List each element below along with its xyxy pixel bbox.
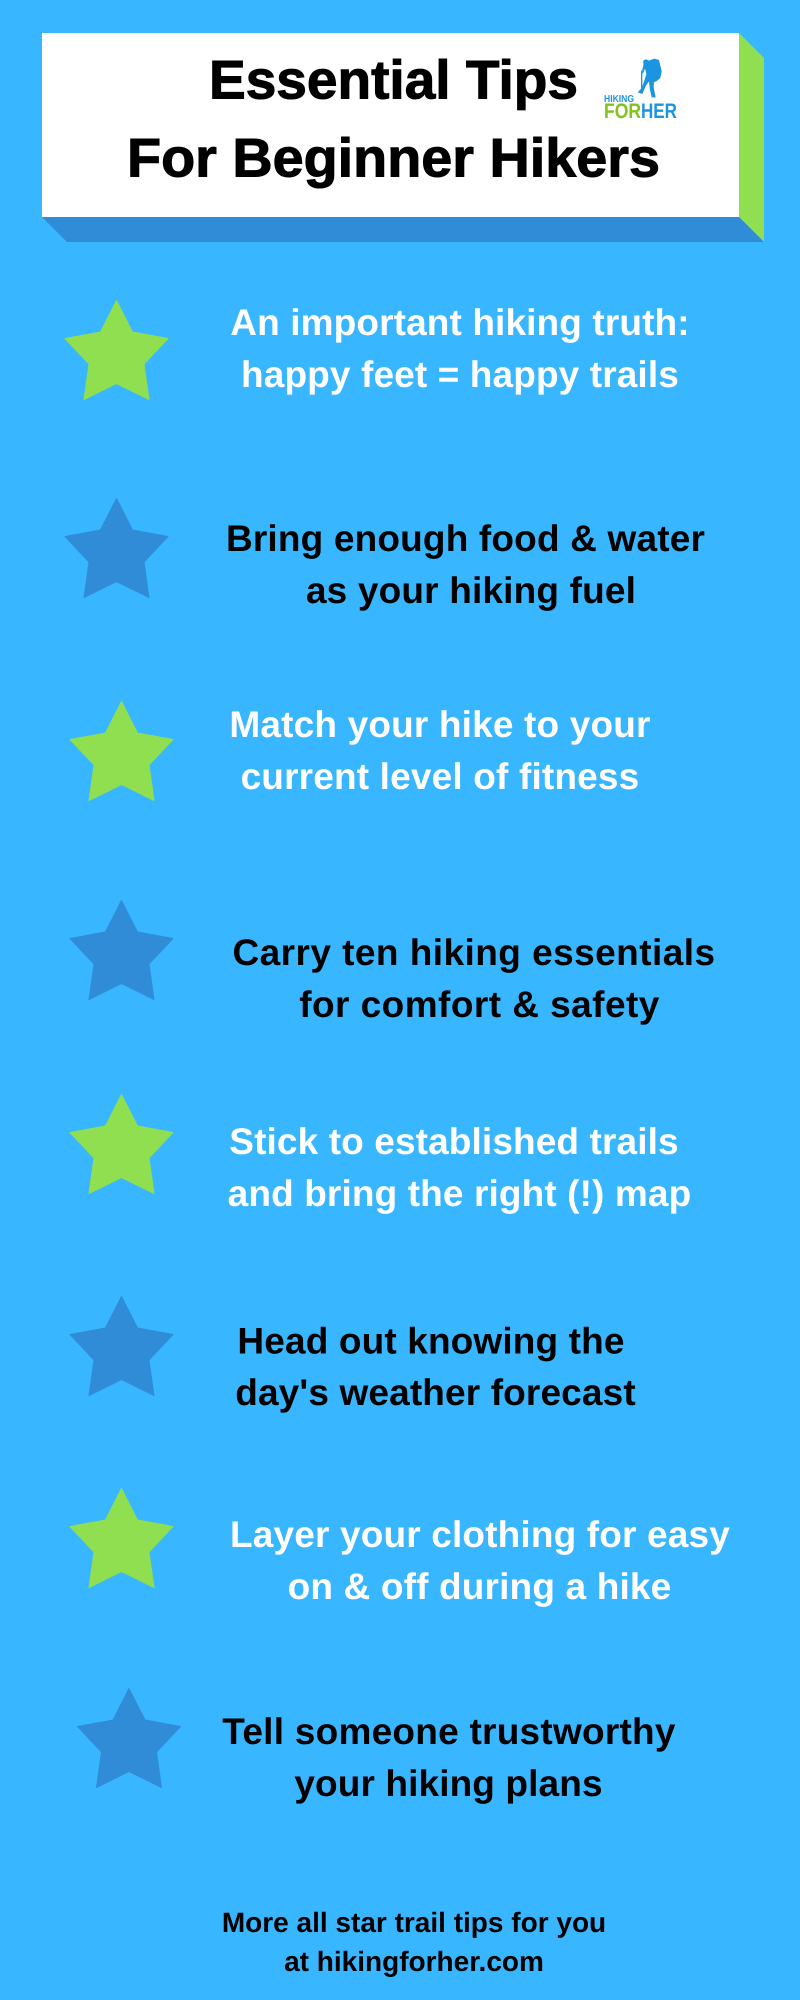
tip 1 text: An important hiking truth:: [230, 302, 690, 343]
tip 7 text: on & off during a hike: [288, 1566, 671, 1607]
tip 5 text: Stick to established trails: [229, 1121, 679, 1162]
icon: hiker silhouette: [638, 59, 662, 97]
logo wordmark: [604, 94, 677, 123]
tip 4 text: Carry ten hiking essentials: [232, 932, 716, 973]
banner front panel: [42, 33, 739, 217]
tip 8 text: your hiking plans: [294, 1763, 603, 1804]
icon: green star: [65, 300, 168, 400]
banner side face: [739, 33, 764, 242]
tip 1: [65, 300, 690, 400]
tip 8 text: Tell someone trustworthy: [222, 1711, 676, 1752]
icon: blue star: [78, 1688, 180, 1788]
tip 8: [78, 1688, 676, 1804]
logo wordmark: FOR: [604, 100, 641, 123]
tip 6 text: Head out knowing the: [237, 1320, 625, 1362]
tip 6: [70, 1296, 636, 1413]
icon: blue star: [65, 498, 168, 598]
icon: green star: [70, 1488, 173, 1588]
tip 2 text: as your hiking fuel: [306, 570, 636, 611]
tip 5: [70, 1094, 691, 1214]
tip 3: [70, 702, 651, 800]
tip 6 text: day's weather forecast: [235, 1372, 636, 1413]
tip 4 text: for comfort & safety: [299, 984, 660, 1025]
logo wordmark: HER: [641, 100, 677, 123]
icon: blue star: [70, 1296, 173, 1396]
title: Essential Tips: [209, 50, 578, 110]
tip 4: [70, 900, 716, 1025]
footer call to action: at hikingforher.com: [284, 1946, 544, 1977]
title: [127, 50, 660, 188]
logo wordmark: HIKING: [604, 94, 634, 105]
tip 2 text: Bring enough food & water: [226, 518, 705, 559]
title: For Beginner Hikers: [127, 128, 660, 188]
tip 1 text: happy feet = happy trails: [241, 354, 679, 395]
logo: Hiking For Her: [604, 59, 677, 123]
icon: green star: [70, 702, 173, 800]
icon: blue star: [70, 900, 173, 1000]
icon: green star: [70, 1094, 173, 1194]
tip 5 text: and bring the right (!) map: [228, 1173, 691, 1214]
tip 2: [65, 498, 705, 611]
header banner: [42, 33, 764, 242]
footer call to action: More all star trail tips for you: [222, 1907, 606, 1938]
banner bottom face: [42, 217, 764, 242]
tip 7: [70, 1488, 730, 1607]
tip 3 text: Match your hike to your: [229, 704, 651, 745]
tip 7 text: Layer your clothing for easy: [230, 1514, 730, 1555]
tip 3 text: current level of fitness: [241, 756, 639, 797]
